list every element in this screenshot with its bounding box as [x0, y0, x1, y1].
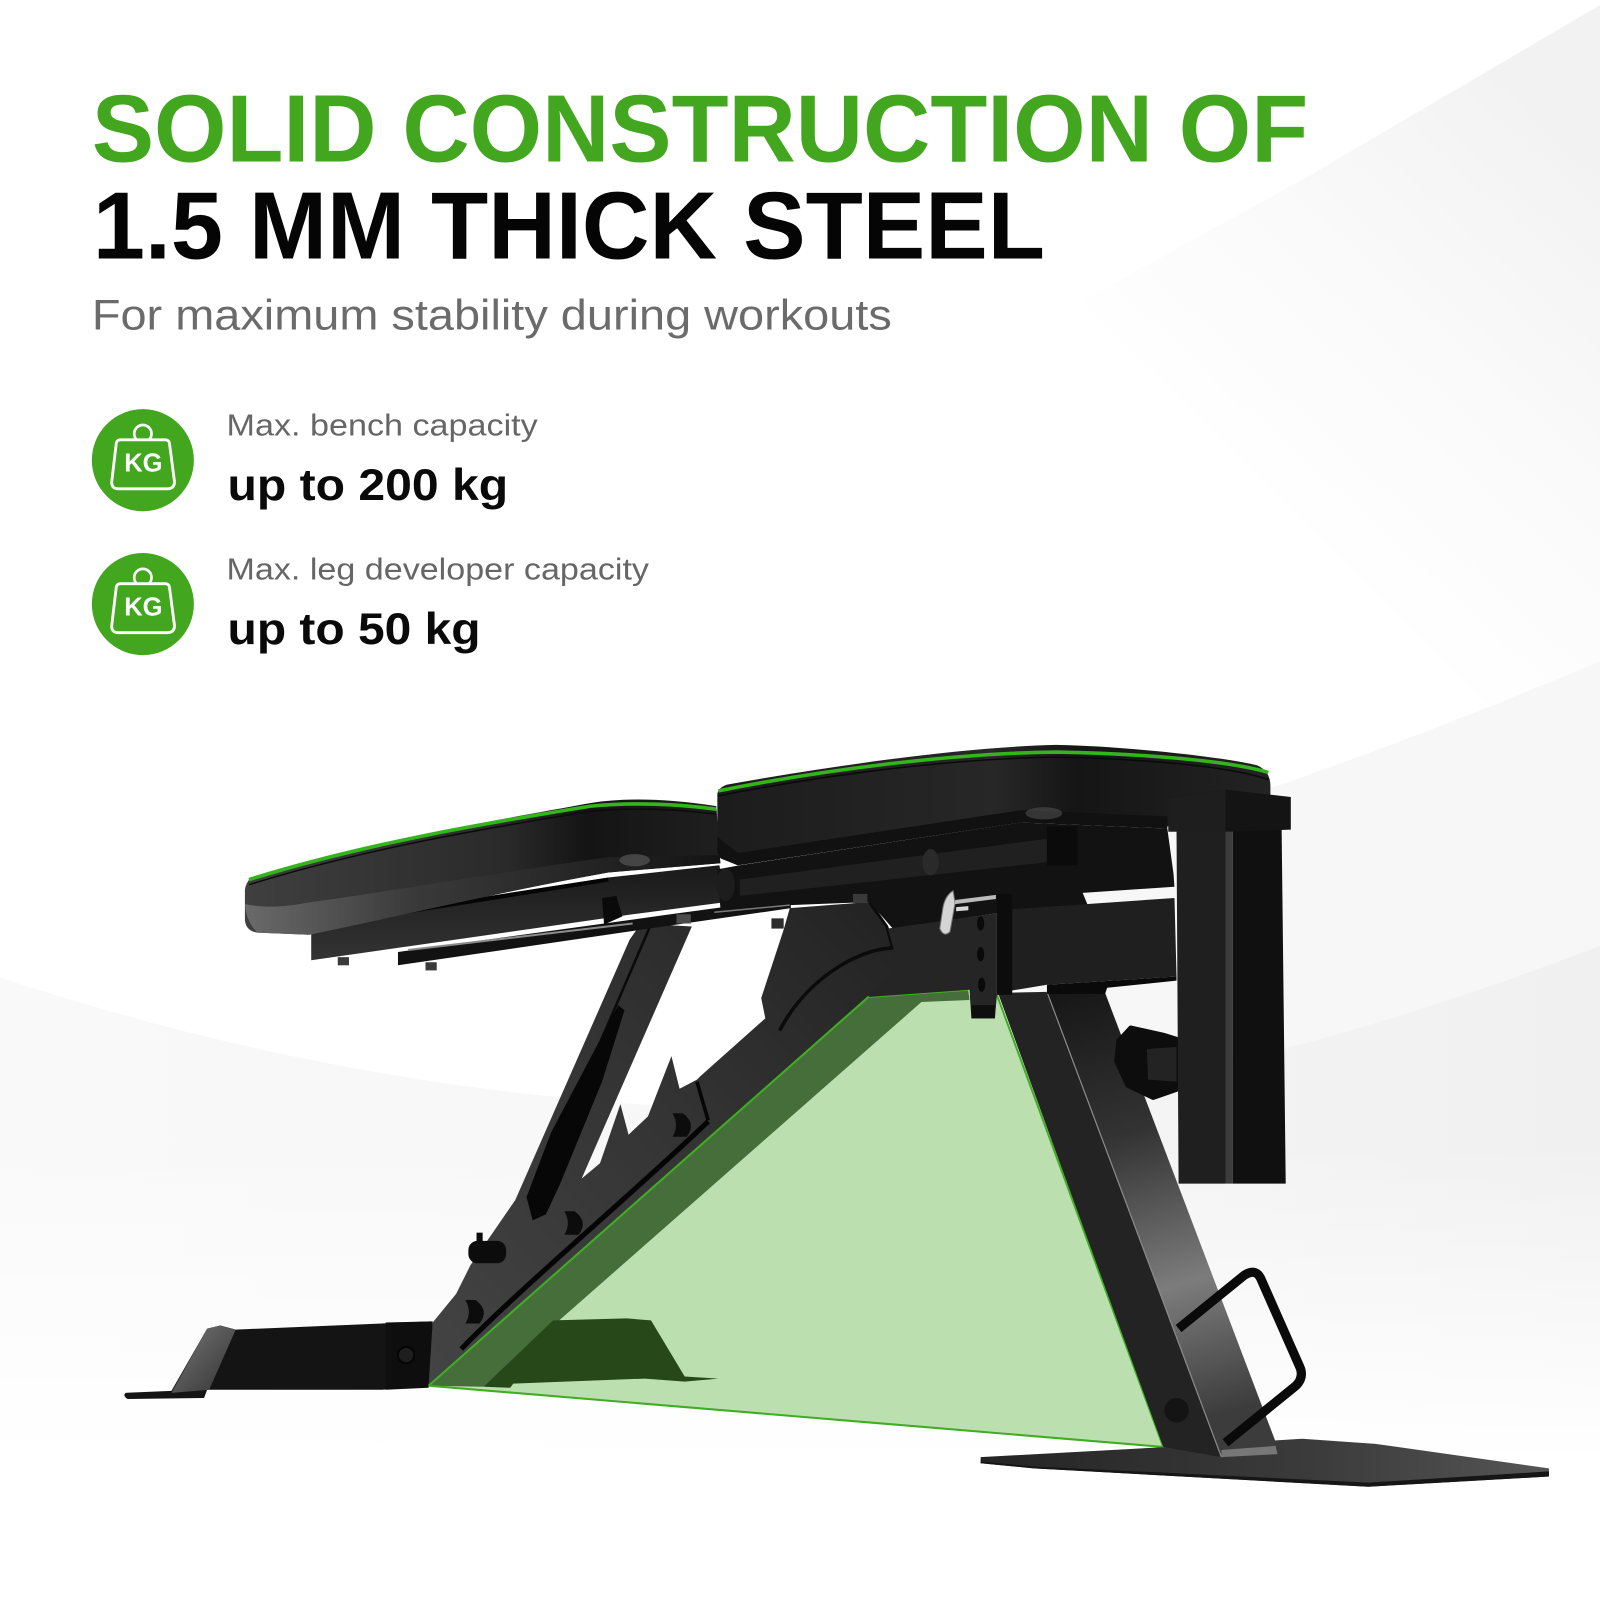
- icon: kg weight: [92, 553, 194, 655]
- icon: kg weight: KG: [124, 593, 162, 621]
- column body: [1177, 831, 1226, 1184]
- leg foot bracket: [1221, 1446, 1278, 1457]
- dark green foot under highlight: [484, 1318, 718, 1388]
- light green triangle highlight: [429, 995, 1163, 1447]
- label: Max. bench capacity: [227, 409, 539, 443]
- seat frame: [714, 822, 1177, 1018]
- icon: kg weight: KG: [124, 449, 162, 477]
- subtitle: For maximum stability during workouts: [92, 292, 892, 340]
- seat cross tube: [998, 898, 1177, 993]
- icon: kg weight: [92, 409, 194, 511]
- workout bench illustration: [124, 745, 1549, 1487]
- rear foot: [124, 1321, 449, 1399]
- strut shadow: [527, 1005, 624, 1220]
- upright column with end cap: [1168, 790, 1291, 1184]
- value: up to 50 kg: [228, 603, 481, 654]
- label: Max. leg developer capacity: [227, 553, 650, 587]
- leg side face: [1047, 992, 1278, 1457]
- title line 1: green: SOLID CONSTRUCTION OF: [92, 76, 1308, 183]
- silver pin: [940, 891, 955, 934]
- rear rails under backrest: [311, 865, 791, 970]
- carry handle: [1179, 1272, 1301, 1443]
- adjustment knob: [1116, 1028, 1177, 1098]
- seat pad: [717, 745, 1270, 865]
- end cap: [1168, 790, 1291, 832]
- foot plate: [981, 1439, 1549, 1487]
- hinge plate with holes: [868, 913, 997, 1018]
- curved bracket line: [780, 948, 893, 1031]
- title line 2: black: 1.5 MM THICK STEEL: [93, 172, 1045, 279]
- strut groove line: [537, 927, 650, 1190]
- highlight strip: [714, 905, 790, 912]
- backrest pad: [245, 800, 720, 935]
- highlight edge lines: [429, 990, 1163, 1447]
- leg front face: [998, 992, 1221, 1457]
- spec: bench capacity: [92, 409, 539, 511]
- title: [92, 76, 1308, 279]
- under-seat rail: [717, 822, 1174, 929]
- value: up to 200 kg: [228, 459, 508, 510]
- dark green leg band under highlight: [429, 990, 969, 1387]
- rear support plate with adjustment teeth: [429, 902, 908, 1386]
- plate bolts: [465, 1113, 691, 1323]
- spec: leg developer capacity: [92, 553, 650, 655]
- tooth edge: [697, 1082, 708, 1120]
- curved black edge above green line: [461, 1121, 708, 1349]
- front leg: [998, 992, 1278, 1457]
- bolt: [1164, 1398, 1189, 1422]
